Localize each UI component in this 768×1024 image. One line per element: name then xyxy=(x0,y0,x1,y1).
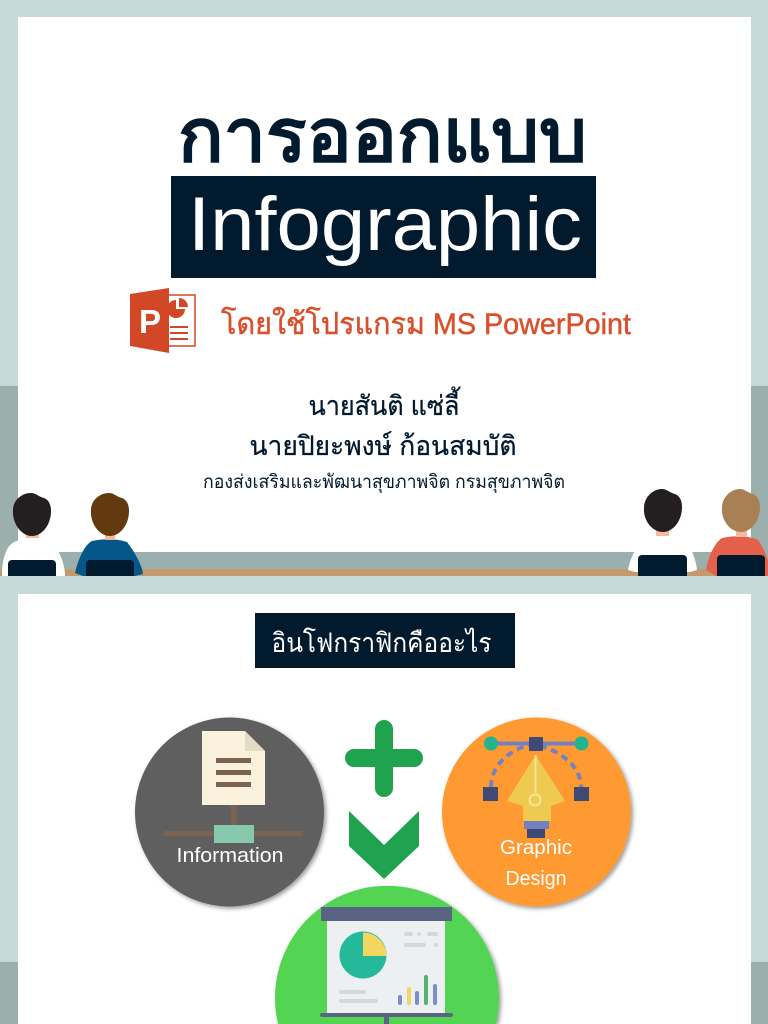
affiliation: กองส่งเสริมและพัฒนาสุขภาพจิต กรมสุขภาพจิต xyxy=(203,472,565,494)
figure: audience member 2 xyxy=(75,493,143,576)
title: Thai heading: การออกแบบ xyxy=(178,94,587,177)
heading banner: อินโฟกราฟิกคืออะไร xyxy=(272,628,492,658)
icon: document network xyxy=(164,731,303,843)
label: Graphic Design: Design xyxy=(506,868,566,890)
icon: plus sign xyxy=(345,720,423,797)
label: Graphic Design: Graphic xyxy=(500,837,572,859)
author names: นายสันติ แซ่ลี้ xyxy=(308,386,461,421)
circle: Information xyxy=(135,718,324,906)
heading banner xyxy=(255,613,515,668)
icon: presentation screen xyxy=(320,907,453,1024)
circle: Graphic Design xyxy=(442,718,631,906)
circle: Infographic result xyxy=(275,886,499,1024)
label: Graphic Design xyxy=(500,837,572,890)
icon: PowerPoint logo xyxy=(130,288,195,353)
icon: pen tool xyxy=(483,736,589,838)
heading banner: Infographic: Infographic xyxy=(188,182,582,267)
subtitle: โดยใช้โปรแกรม MS PowerPoint xyxy=(221,306,632,341)
figure: audience member 1 xyxy=(2,493,65,576)
author names xyxy=(250,386,516,461)
panel: what is infographic slide xyxy=(18,594,751,1024)
circle: Information: Information xyxy=(176,845,284,867)
figure: audience member 4 xyxy=(706,489,768,576)
icon: down chevron arrow xyxy=(349,811,419,879)
panel: title slide xyxy=(0,17,768,594)
figure: audience member 3 xyxy=(628,489,697,576)
icon: PowerPoint logo: P xyxy=(139,303,161,340)
author names: นายปิยะพงษ์ ก้อนสมบัติ xyxy=(250,430,516,461)
